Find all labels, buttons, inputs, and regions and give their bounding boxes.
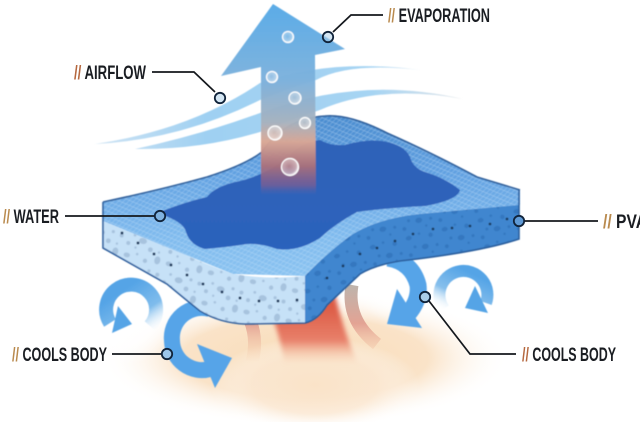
heat column (268, 295, 358, 364)
foam dark dots (120, 218, 508, 302)
water bubbles (266, 32, 310, 176)
heat wave arcs (250, 285, 377, 362)
leader: airflow (152, 72, 225, 103)
circular arrow: small left (106, 285, 156, 333)
circular arrow: large left (172, 308, 232, 388)
bottom edge (103, 190, 519, 324)
circular arrow: large right (387, 258, 422, 328)
label: evaporation (323, 6, 490, 42)
clear area inside rings (75, 247, 433, 365)
label: water (3, 207, 165, 228)
pad top surface (103, 116, 520, 276)
foam front face (103, 221, 305, 324)
leader: evaporation (323, 15, 383, 42)
foam side face (305, 205, 519, 323)
label: airflow: // AIRFLOW (74, 63, 146, 84)
pad back edge (103, 116, 520, 202)
body heat background (75, 247, 520, 422)
label: airflow (74, 63, 225, 103)
leader: PVA (514, 216, 598, 226)
label: water: // WATER (3, 207, 59, 228)
label: cools body left: // COOLS BODY (12, 345, 107, 366)
airflow swooshes (95, 66, 463, 149)
leader: cools body right (420, 292, 516, 354)
label: cools body right (420, 292, 616, 366)
PVA pad (103, 116, 520, 324)
circular arrow: small right (439, 271, 488, 313)
water pool (160, 140, 460, 250)
label: PVA (514, 212, 640, 233)
label: evaporation: // EVAPORATION (388, 6, 490, 27)
evaporation arrow (221, 4, 345, 195)
leader: water (65, 211, 165, 221)
leader: cools body left (112, 349, 172, 359)
